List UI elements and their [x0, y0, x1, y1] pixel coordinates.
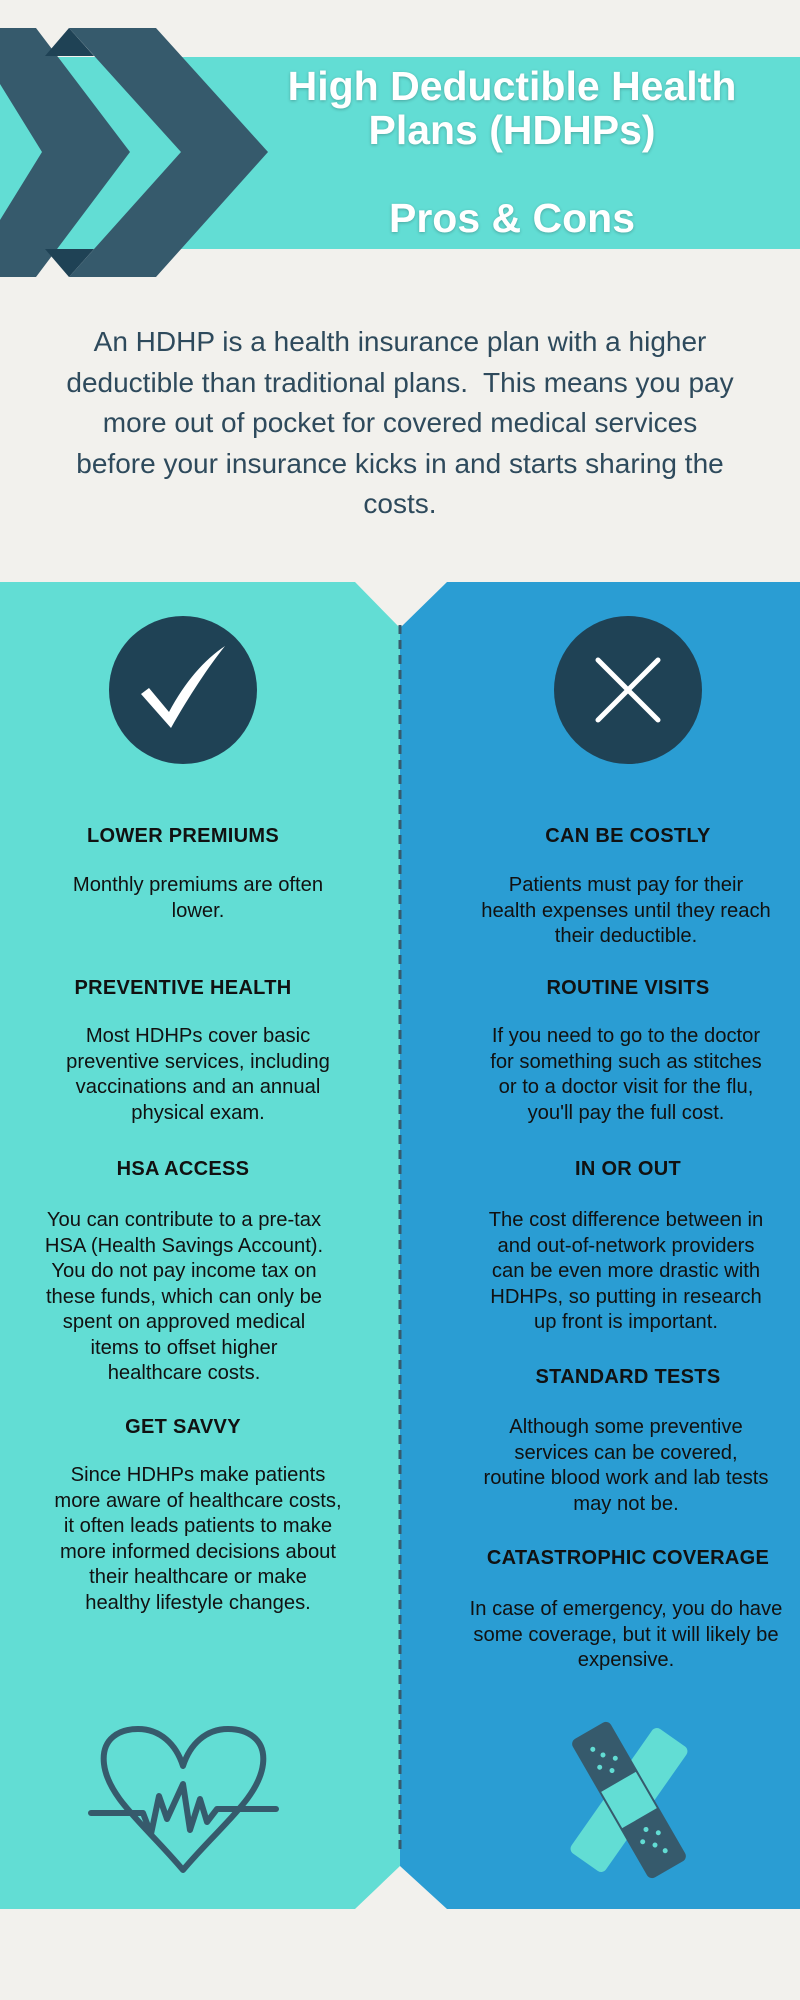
text: routine visits: you'll pay the full cost. — [528, 1102, 724, 1124]
text: standard tests: services can be covered, — [514, 1442, 738, 1464]
text: can be costly: health expenses until they reach — [481, 900, 771, 922]
text: get savvy: their healthcare or make — [89, 1566, 307, 1588]
title — [288, 63, 736, 241]
text: catastrophic coverage: expensive. — [578, 1649, 674, 1671]
text: hsa access: You do not pay income tax on — [51, 1260, 317, 1282]
intro text — [66, 326, 734, 519]
header band — [0, 57, 800, 249]
text: can be costly: their deductible. — [555, 925, 697, 947]
text: routine visits: or to a doctor visit for the flu, — [499, 1076, 753, 1098]
text: preventive health — [66, 1025, 330, 1124]
panels background — [0, 582, 800, 1909]
text: standard tests — [483, 1416, 769, 1514]
text: routine visits: for something such as stitches — [490, 1050, 762, 1072]
text: can be costly — [481, 874, 771, 947]
title: Pros & Cons — [389, 195, 635, 241]
heading: standard tests: STANDARD TESTS — [536, 1366, 720, 1388]
text: standard tests: Although some preventive — [509, 1416, 743, 1438]
pros column — [45, 825, 342, 1614]
text: lower premiums — [73, 874, 323, 922]
text: standard tests: routine blood work and lab tests — [483, 1467, 769, 1489]
intro text: An HDHP is a health insurance plan with a higher — [94, 326, 706, 357]
icon: heart with pulse — [88, 1726, 279, 1873]
text: hsa access: items to offset higher — [90, 1336, 278, 1358]
heading: get savvy: GET SAVVY — [125, 1416, 241, 1438]
text: standard tests: may not be. — [573, 1492, 679, 1514]
heading: lower premiums: LOWER PREMIUMS — [87, 825, 279, 847]
heading: preventive health: PREVENTIVE HEALTH — [74, 977, 291, 999]
text: in or out: up front is important. — [534, 1311, 718, 1333]
text: preventive health: physical exam. — [131, 1102, 265, 1124]
text: in or out — [489, 1209, 763, 1333]
heading: in or out: IN OR OUT — [575, 1158, 681, 1180]
text: can be costly: Patients must pay for their — [509, 874, 743, 896]
text: hsa access: these funds, which can only be — [46, 1286, 322, 1308]
text: get savvy: more informed decisions about — [60, 1540, 336, 1562]
text: routine visits: If you need to go to the doctor — [492, 1025, 760, 1047]
text: preventive health: preventive services, including — [66, 1050, 330, 1072]
text: in or out: The cost difference between in — [489, 1209, 763, 1231]
chevron decoration — [0, 28, 268, 277]
text: get savvy — [54, 1464, 342, 1614]
text: in or out: and out-of-network providers — [498, 1234, 754, 1256]
text: in or out: HDHPs, so putting in research — [490, 1286, 762, 1308]
text: get savvy: Since HDHPs make patients — [71, 1464, 325, 1486]
text: catastrophic coverage — [470, 1598, 782, 1671]
intro text: before your insurance kicks in and starts sharing the — [76, 448, 724, 478]
text: hsa access — [45, 1209, 323, 1384]
text: hsa access: healthcare costs. — [108, 1362, 260, 1384]
icon: check circle — [109, 616, 257, 764]
text: preventive health: Most HDHPs cover basic — [86, 1025, 310, 1047]
text: get savvy: more aware of healthcare costs, — [54, 1490, 342, 1512]
text: hsa access: HSA (Health Savings Account). — [45, 1234, 323, 1256]
text: in or out: can be even more drastic with — [492, 1260, 760, 1282]
text: get savvy: it often leads patients to make — [64, 1515, 332, 1537]
text: hsa access: spent on approved medical — [63, 1311, 305, 1333]
text: catastrophic coverage: some coverage, but it will likely be — [473, 1624, 779, 1646]
intro text: more out of pocket for covered medical services — [103, 407, 697, 438]
text: get savvy: healthy lifestyle changes. — [85, 1592, 311, 1614]
text: lower premiums: Monthly premiums are often — [73, 874, 323, 896]
title: Plans (HDHPs) — [368, 107, 656, 153]
intro text: costs. — [363, 488, 437, 519]
heading: routine visits: ROUTINE VISITS — [546, 977, 710, 999]
text: routine visits — [490, 1025, 762, 1124]
text: preventive health: vaccinations and an annual — [76, 1076, 320, 1098]
heading: catastrophic coverage: CATASTROPHIC COVERAGE — [487, 1547, 769, 1569]
intro text: deductible than traditional plans. This means you pay — [66, 366, 734, 398]
icon: X circle — [554, 616, 702, 764]
heading: can be costly: CAN BE COSTLY — [545, 825, 711, 847]
text: catastrophic coverage: In case of emergency, you do have — [470, 1598, 782, 1620]
text: lower premiums: lower. — [172, 900, 224, 922]
cons column — [470, 825, 782, 1671]
title: High Deductible Health — [288, 63, 736, 109]
icon: crossed bandages — [570, 1722, 688, 1878]
heading: hsa access: HSA ACCESS — [117, 1158, 249, 1180]
text: hsa access: You can contribute to a pre-tax — [47, 1209, 321, 1231]
